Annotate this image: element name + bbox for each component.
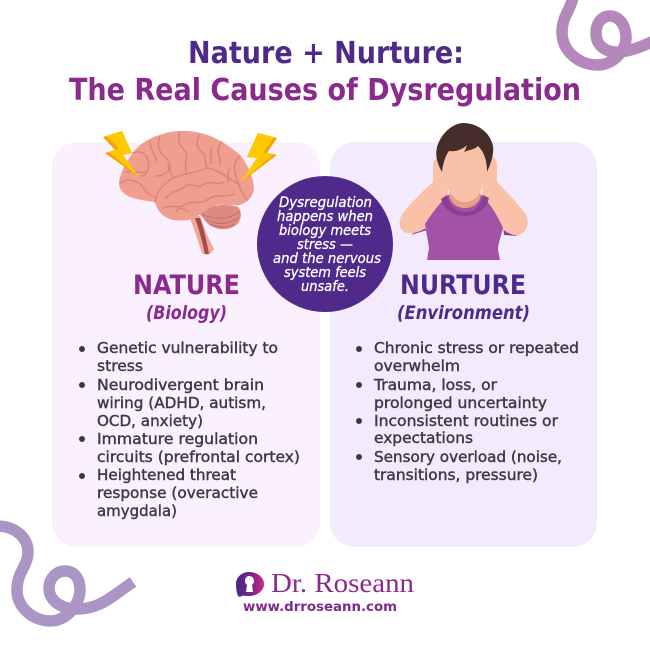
heading: nature xyxy=(133,270,240,324)
list: nature causes: OCD, anxiety) xyxy=(97,412,203,430)
list: nature causes: Immature regulation xyxy=(97,430,258,448)
title xyxy=(69,36,581,108)
list: nurture causes: expectations xyxy=(374,429,473,447)
decorative swirl: bottom left xyxy=(0,526,133,621)
callout circle: unsafe. xyxy=(301,279,349,295)
callout circle: stress — xyxy=(297,237,353,253)
panel: nurture xyxy=(330,142,597,547)
list: nature causes xyxy=(79,339,300,520)
icon: child covering ears xyxy=(400,123,528,260)
list: nurture causes xyxy=(356,339,579,484)
list: nature causes: Neurodivergent brain xyxy=(97,376,264,394)
heading: nurture: NURTURE xyxy=(400,270,526,301)
heading: nurture xyxy=(397,270,530,324)
callout circle: biology meets xyxy=(279,223,371,239)
list: nature causes: wiring (ADHD, autism, xyxy=(97,394,266,412)
list: nurture causes: overwhelm xyxy=(374,357,460,375)
logo: Dr. Roseann: Dr. Roseann xyxy=(271,568,415,598)
list: nurture causes: Sensory overload (noise, xyxy=(374,448,562,466)
callout circle xyxy=(257,176,393,312)
icon: lightning bolt left xyxy=(103,131,140,178)
callout circle: happens when xyxy=(277,209,373,225)
title: Nature + Nurture: xyxy=(188,36,464,71)
list: nature causes: Genetic vulnerability to xyxy=(97,339,278,357)
title: The Real Causes of Dysregulation xyxy=(69,73,581,108)
list: nurture causes: transitions, pressure) xyxy=(374,466,538,484)
decorative swirl: top right xyxy=(562,0,650,65)
panel: nature xyxy=(52,142,320,547)
list: nurture causes: Chronic stress or repeated xyxy=(374,339,579,357)
icon: brain xyxy=(119,131,254,255)
list: nature causes: stress xyxy=(97,357,143,375)
icon: lightning bolt right xyxy=(240,133,277,183)
heading: nature: NATURE xyxy=(133,270,240,301)
list: nurture causes: Inconsistent routines or xyxy=(374,412,559,430)
list: nature causes: Heightened threat xyxy=(97,466,236,484)
list: nature causes: response (overactive xyxy=(97,484,258,502)
list: nature causes: circuits (prefrontal cortex) xyxy=(97,448,300,466)
heading: nurture: (Environment) xyxy=(397,302,530,324)
callout circle: and the nervous xyxy=(273,251,381,267)
heading: nature: (Biology) xyxy=(146,302,227,324)
callout circle: system feels xyxy=(284,265,366,281)
callout circle: Dysregulation xyxy=(279,195,372,211)
list: nurture causes: prolonged uncertainty xyxy=(374,394,547,412)
list: nurture causes: Trauma, loss, or xyxy=(373,376,498,394)
list: nature causes: amygdala) xyxy=(97,502,177,520)
website url: www.drroseann.com xyxy=(243,599,397,615)
